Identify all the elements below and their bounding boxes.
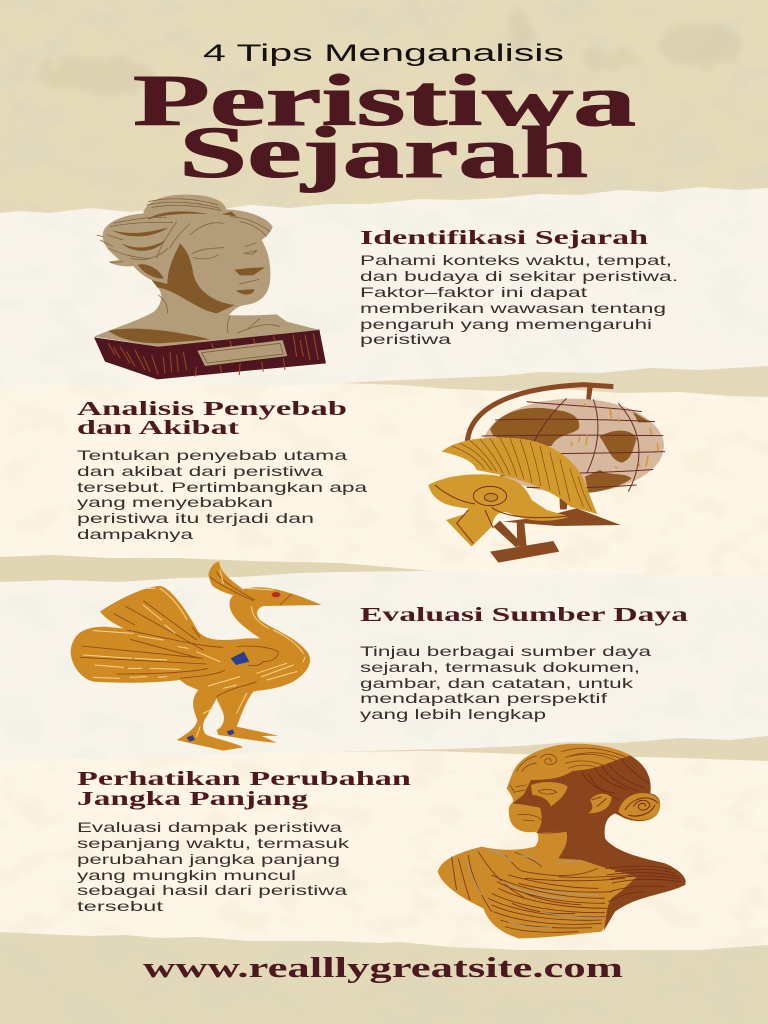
text block: Identifikasi Sejarah: memberikan wawasan tentang <box>360 301 666 316</box>
text block: Identifikasi Sejarah <box>360 253 678 347</box>
text block: Identifikasi Sejarah: peristiwa <box>360 332 452 347</box>
text block: Analisis Penyebab dan Akibat: yang menyebabkan <box>77 495 273 510</box>
text block: Perhatikan Perubahan Jangka Panjang: Evaluasi dampak peristiwa <box>77 820 343 835</box>
text block: Evaluasi Sumber Daya <box>360 644 652 722</box>
illustration: globe and Roman helmet <box>428 385 665 563</box>
heading: Analisis Penyebab dan Akibat: Analisis Penyebab <box>77 398 347 420</box>
text block: Analisis Penyebab dan Akibat: tersebut. Pertimbangkan apa <box>77 480 368 495</box>
title <box>133 60 636 193</box>
text block: Identifikasi Sejarah: pengaruh yang memengaruhi <box>360 317 652 332</box>
text block: Perhatikan Perubahan Jangka Panjang: sepanjang waktu, termasuk <box>77 836 349 851</box>
title: Sejarah <box>179 112 588 193</box>
heading: Perhatikan Perubahan Jangka Panjang <box>77 768 411 810</box>
text block: Evaluasi Sumber Daya: Tinjau berbagai sumber daya <box>360 644 652 659</box>
illustration: bronze female bust <box>438 744 686 938</box>
text block: Evaluasi Sumber Daya: gambar, dan catatan, untuk <box>360 676 633 691</box>
heading: Analisis Penyebab dan Akibat: dan Akibat <box>77 417 240 439</box>
heading: Analisis Penyebab dan Akibat <box>77 398 347 439</box>
title: Peristiwa <box>133 60 636 141</box>
illustration: golden bird <box>71 562 322 751</box>
text block: Perhatikan Perubahan Jangka Panjang: yang mungkin muncul <box>77 868 296 883</box>
heading: Perhatikan Perubahan Jangka Panjang: Perhatikan Perubahan <box>77 768 411 790</box>
text block: Perhatikan Perubahan Jangka Panjang: tersebut <box>77 899 163 914</box>
text block: Evaluasi Sumber Daya: sejarah, termasuk dokumen, <box>360 660 640 675</box>
footer website: www.realllygreatsite.com <box>143 953 623 984</box>
heading: Perhatikan Perubahan Jangka Panjang: Jangka Panjang <box>77 788 308 810</box>
text block: Identifikasi Sejarah: dan budaya di sekitar peristiwa. <box>360 269 678 284</box>
subtitle: 4 Tips Menganalisis <box>203 40 564 67</box>
heading: Evaluasi Sumber Daya: Evaluasi Sumber Daya <box>360 604 688 626</box>
text block: Analisis Penyebab dan Akibat: dampaknya <box>77 527 194 542</box>
text block: Analisis Penyebab dan Akibat <box>77 448 368 542</box>
text block: Perhatikan Perubahan Jangka Panjang: sebagai hasil dari peristiwa <box>77 883 348 898</box>
text block: Analisis Penyebab dan Akibat: Tentukan penyebab utama <box>77 448 348 463</box>
heading: Identifikasi Sejarah: Identifikasi Sejarah <box>360 227 648 249</box>
text block: Analisis Penyebab dan Akibat: dan akibat dari peristiwa <box>77 464 324 479</box>
text block: Analisis Penyebab dan Akibat: peristiwa itu terjadi dan <box>77 511 314 526</box>
illustration: marble bust on plinth <box>94 195 326 379</box>
text block: Evaluasi Sumber Daya: mendapatkan perspektif <box>360 691 607 706</box>
text block: Identifikasi Sejarah: Faktor–faktor ini dapat <box>360 285 587 300</box>
text block: Evaluasi Sumber Daya: yang lebih lengkap <box>360 707 546 722</box>
text block: Perhatikan Perubahan Jangka Panjang: perubahan jangka panjang <box>77 852 340 867</box>
text block: Identifikasi Sejarah: Pahami konteks waktu, tempat, <box>360 253 672 268</box>
text block: Perhatikan Perubahan Jangka Panjang <box>77 820 349 914</box>
